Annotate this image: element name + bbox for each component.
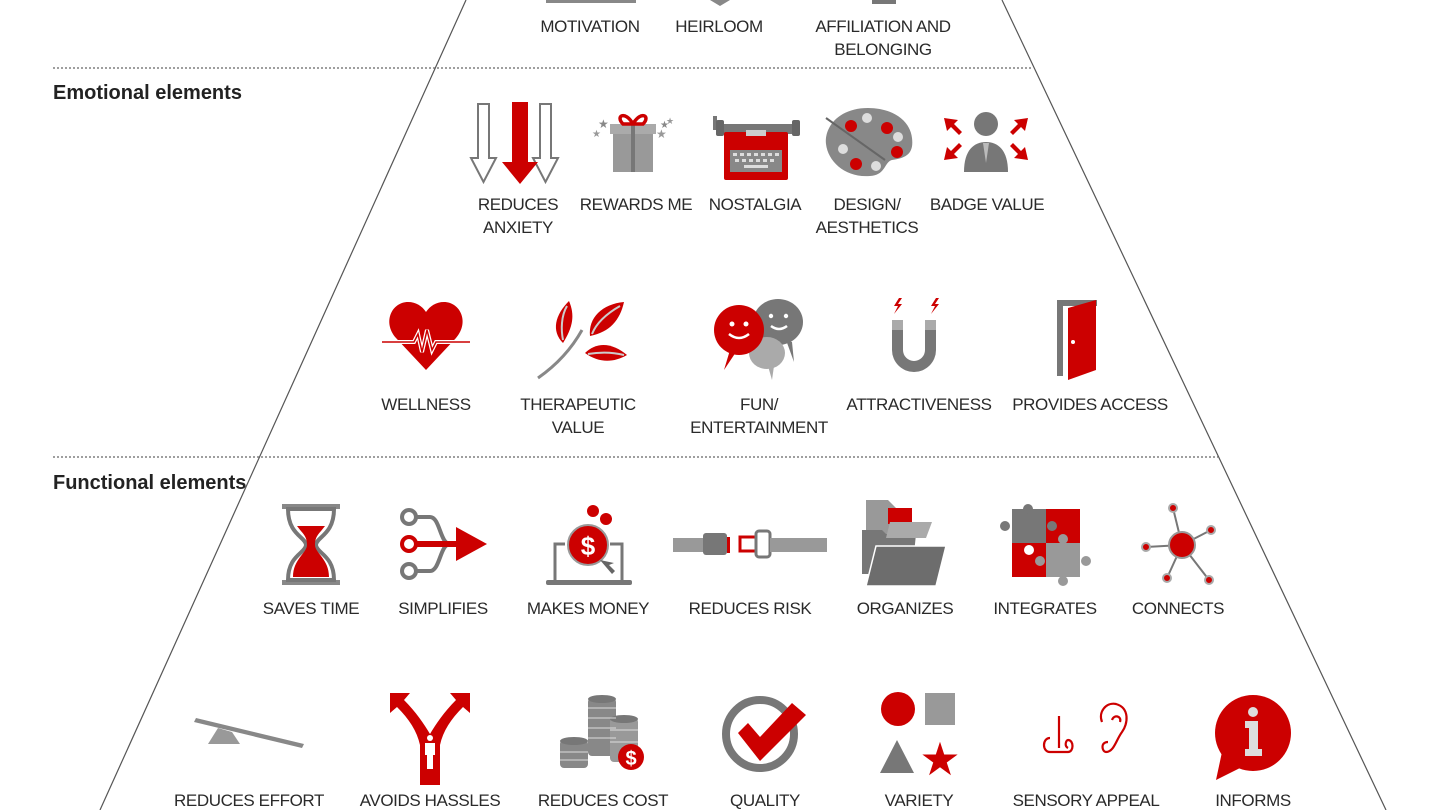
icon: reduces risk — [673, 531, 827, 618]
icon: avoids hassles — [360, 693, 500, 810]
icon: reduces anxiety — [471, 102, 558, 237]
label: REDUCES COST — [538, 791, 668, 810]
label: INFORMS — [1215, 791, 1291, 810]
label: SENSORY APPEAL — [1013, 791, 1159, 810]
label: MAKES MONEY — [527, 599, 649, 618]
label: VARIETY — [885, 791, 953, 810]
icon: quality — [726, 700, 806, 810]
icon: saves time — [263, 504, 359, 618]
icon: rewards me: ★ — [656, 127, 667, 141]
label: ORGANIZES — [857, 599, 953, 618]
icon: makes money — [527, 505, 649, 618]
icon: fun/entertainment — [690, 299, 828, 437]
label: AVOIDS HASSLES — [360, 791, 500, 810]
icon: badge value — [930, 112, 1044, 214]
icon: reduces cost: $ — [625, 748, 637, 770]
label: NOSTALGIA — [709, 195, 802, 214]
label: AESTHETICS — [816, 218, 918, 237]
label: FUN/ — [740, 395, 778, 414]
icon: connects — [1132, 504, 1224, 618]
icon: reduces cost — [538, 695, 668, 810]
icon: attractiveness — [846, 298, 992, 414]
label: BADGE VALUE — [930, 195, 1044, 214]
icon: rewards me: ★ — [660, 120, 669, 131]
icon: variety: ★ — [919, 732, 961, 786]
label: ANXIETY — [483, 218, 553, 237]
icon: sensory appeal — [1013, 704, 1159, 810]
label: CONNECTS — [1132, 599, 1224, 618]
icon: wellness — [381, 302, 471, 414]
label: motivation: MOTIVATION — [540, 17, 640, 36]
label: affiliation and belonging: BELONGING — [834, 40, 932, 59]
label: REDUCES EFFORT — [174, 791, 324, 810]
label: QUALITY — [730, 791, 800, 810]
label: WELLNESS — [381, 395, 471, 414]
icon: rewards me — [580, 116, 692, 214]
icon: variety — [880, 692, 961, 810]
label: DESIGN/ — [833, 195, 901, 214]
icon: integrates — [993, 504, 1097, 618]
label: REWARDS ME — [580, 195, 692, 214]
label: REDUCES RISK — [689, 599, 812, 618]
icon: organizes — [857, 500, 953, 618]
icon: reduces effort — [174, 718, 324, 810]
heading: functional elements: Functional elements — [53, 472, 246, 494]
label: ENTERTAINMENT — [690, 418, 828, 437]
icon: rewards me: ★ — [598, 117, 609, 131]
label: INTEGRATES — [993, 599, 1097, 618]
icon: nostalgia — [709, 116, 802, 214]
label: heirloom: HEIRLOOM — [675, 17, 763, 36]
label: ATTRACTIVENESS — [846, 395, 992, 414]
top row: partial icons and labels — [540, 0, 951, 59]
label: REDUCES — [478, 195, 558, 214]
label: VALUE — [552, 418, 604, 437]
label: SIMPLIFIES — [398, 599, 488, 618]
label: THERAPEUTIC — [520, 395, 636, 414]
heading: emotional elements: Emotional elements — [53, 82, 242, 104]
label: affiliation and belonging: AFFILIATION AND — [815, 17, 951, 36]
icon: design/aesthetics — [816, 108, 918, 237]
icon: therapeutic value — [520, 301, 636, 437]
icon: simplifies — [398, 510, 488, 618]
icon: rewards me: ★ — [592, 129, 601, 140]
icon: provides access — [1012, 300, 1168, 414]
icon: informs — [1215, 695, 1291, 810]
icon: makes money: $ — [581, 531, 596, 561]
label: SAVES TIME — [263, 599, 359, 618]
icon: rewards me: ★ — [666, 116, 674, 126]
label: PROVIDES ACCESS — [1012, 395, 1168, 414]
